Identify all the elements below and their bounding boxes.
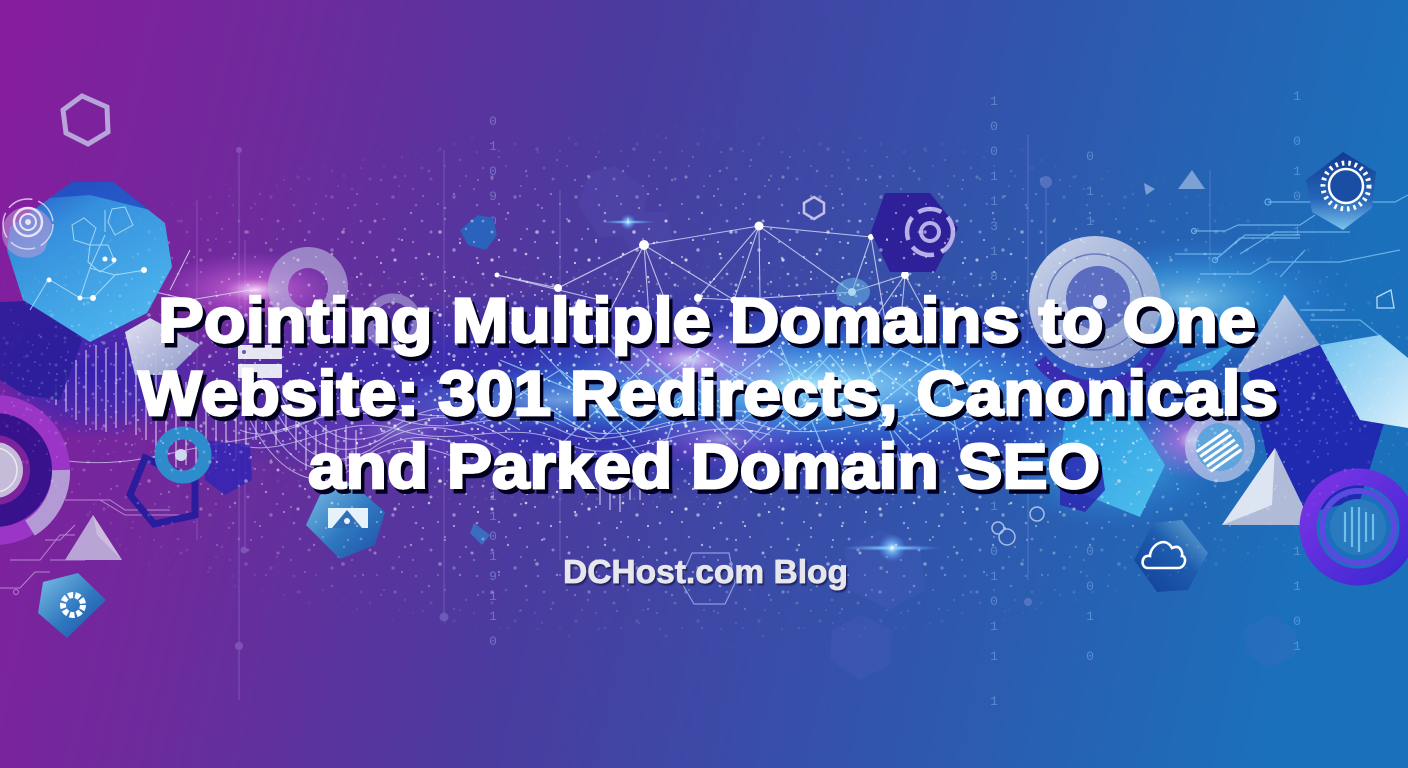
waveform bars left [56,342,640,512]
icon: server stack [238,345,282,378]
binary code columns: 1 [489,489,497,504]
title: Website: 301 Redirects, Canonicals [138,359,1278,429]
circuit traces right [1175,195,1408,340]
icon: lavender pyramid [65,515,122,560]
binary code columns: 9 [489,569,497,584]
icon: purple ring right [1308,477,1408,577]
icon: large silver lens ring [1029,236,1161,388]
binary code columns: 0 [489,634,497,649]
circuit traces left [0,500,180,594]
binary code columns: 1 [990,619,998,634]
flowing wave mesh [60,385,980,479]
title: and Parked Domain SEO [308,432,1100,502]
icon: dark hexagon with ring top centre [871,193,958,272]
binary code columns: 1 [489,509,497,524]
binary code columns: 0 [1086,149,1094,164]
binary code columns: 1 [1293,639,1301,654]
binary code columns: 0 [489,114,497,129]
binary code columns: 0 [1293,134,1301,149]
binary code columns: 0 [1293,614,1301,629]
sparkle: light flare [600,214,942,562]
binary code columns: 0 [1086,649,1094,664]
binary code columns: 1 [1086,184,1094,199]
binary code columns [489,89,1301,709]
binary code columns: 1 [990,694,998,709]
binary code columns: 1 [990,94,998,109]
icon: faint triangles [1144,170,1205,195]
icon: concentric target on crystal [2,199,53,258]
title: Pointing Multiple Domains to One [158,286,1256,356]
icon: small outlined hexagon [804,197,824,219]
icon: silver pyramid right [1222,448,1312,525]
binary code columns: 1 [990,649,998,664]
binary code columns: 0 [489,529,497,544]
binary code columns: 1 [1293,224,1301,239]
icon: dark outlined hexagon with ring [130,433,252,524]
icon: small dark hexagon by SEO [1060,445,1105,512]
title [138,286,1278,502]
binary code columns: 0 [1086,579,1094,594]
binary code columns: 8 [990,269,998,284]
binary code columns: 1 [1293,544,1301,559]
network nodes [494,222,909,304]
icon: silver crystal shard [125,318,200,375]
icon: small blue hexagon [460,215,497,250]
icon: small silver ring [369,298,417,346]
icon: faint circles near SEO [992,507,1044,545]
binary code columns: 1 [489,589,497,604]
binary code columns: 0 [990,594,998,609]
central glow band [0,238,1370,530]
icon: small cube bottom centre [470,523,490,545]
binary code columns: 0 [990,144,998,159]
binary code columns: 1 [990,169,998,184]
binary code columns: 1 [489,549,497,564]
binary code columns: 1 [990,569,998,584]
binary code columns: 1 [990,244,998,259]
binary code columns: 0 [489,164,497,179]
particle field [2,125,1408,638]
binary code columns: 0 [489,214,497,229]
binary code columns: 3 [990,219,998,234]
binary code columns: 1 [489,609,497,624]
binary code columns: 1 [990,194,998,209]
icon: cyan hexagon cluster [1060,410,1165,517]
binary code columns: 0 [1086,544,1094,559]
icon: silver ring [268,247,348,327]
icon: dark polygon behind left crystal [0,300,82,400]
icon: large purple ring left [0,404,61,536]
binary code columns: 9 [489,189,497,204]
binary code columns: 1 [990,499,998,514]
binary code columns: 1 [1293,89,1301,104]
icon: large blue crystal with constellation [7,182,172,342]
subtitle: DCHost.com Blog [563,553,848,590]
binary code columns: 1 [1293,164,1301,179]
icon: small tag right [1377,290,1394,308]
binary code columns: 1 [1086,214,1094,229]
icon: chip in silver ring [1185,412,1255,482]
binary code columns: 0 [990,119,998,134]
icon: hexagon with gear top right [1306,152,1376,230]
thin vertical connector lines [197,135,1210,700]
network mesh lines [125,226,940,340]
binary code columns: 1 [1086,609,1094,624]
binary code columns: 1 [489,139,497,154]
icon: right crystal group [1175,295,1408,515]
faint background hexagons [578,166,1296,680]
icon: cloud hexagon [1134,520,1208,592]
binary code columns: 0 [990,544,998,559]
binary code columns: 1 [1293,579,1301,594]
binary code columns: 0 [1293,189,1301,204]
icon: outlined hexagon top left [63,96,108,144]
icon: hexagon with gear bottom left [38,573,106,638]
icon: cyan blob [836,278,870,306]
icon: camera hexagon [306,482,385,559]
hexagon outline behind subtitle [680,553,735,604]
